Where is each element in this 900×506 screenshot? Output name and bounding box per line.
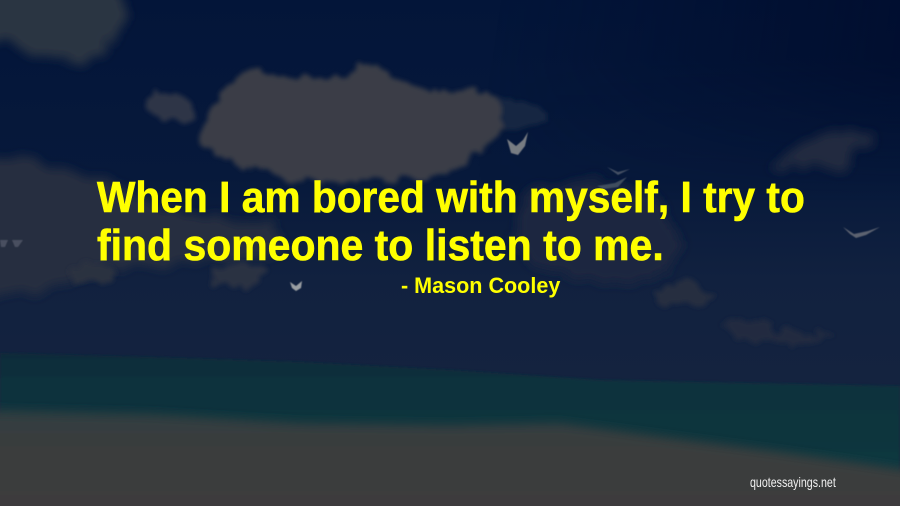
quote line 1: When I am bored with myself, I try to	[97, 173, 805, 222]
clouds	[0, 0, 875, 345]
quote line 2: find someone to listen to me.	[97, 221, 664, 270]
beach	[0, 410, 900, 506]
sea	[0, 353, 900, 490]
birds	[0, 132, 880, 291]
watermark: quotessayings.net	[750, 474, 836, 490]
attribution: - Mason Cooley	[401, 273, 560, 298]
quote text	[96, 173, 805, 270]
